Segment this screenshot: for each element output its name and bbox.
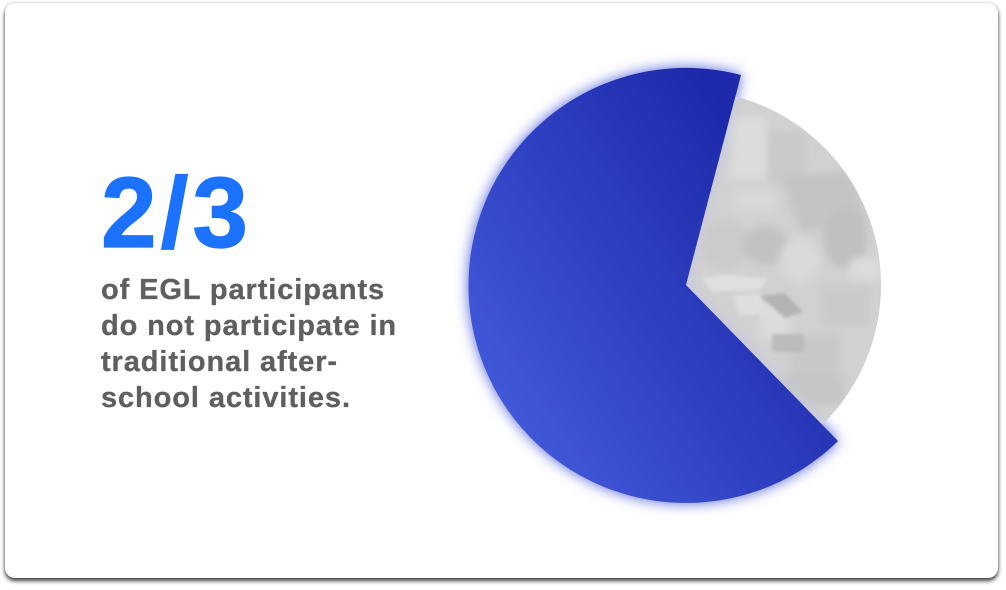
description text: of EGL participants [101, 274, 385, 306]
gray photo slice [686, 96, 881, 424]
description text [101, 274, 397, 414]
description text: do not participate in [101, 310, 397, 342]
description text: traditional after- [101, 346, 338, 378]
description text: school activities. [101, 382, 351, 414]
big stat: 2/3 [101, 157, 252, 269]
blue two-thirds slice [468, 68, 838, 503]
pie chart [458, 57, 881, 514]
blue glow [468, 68, 838, 503]
